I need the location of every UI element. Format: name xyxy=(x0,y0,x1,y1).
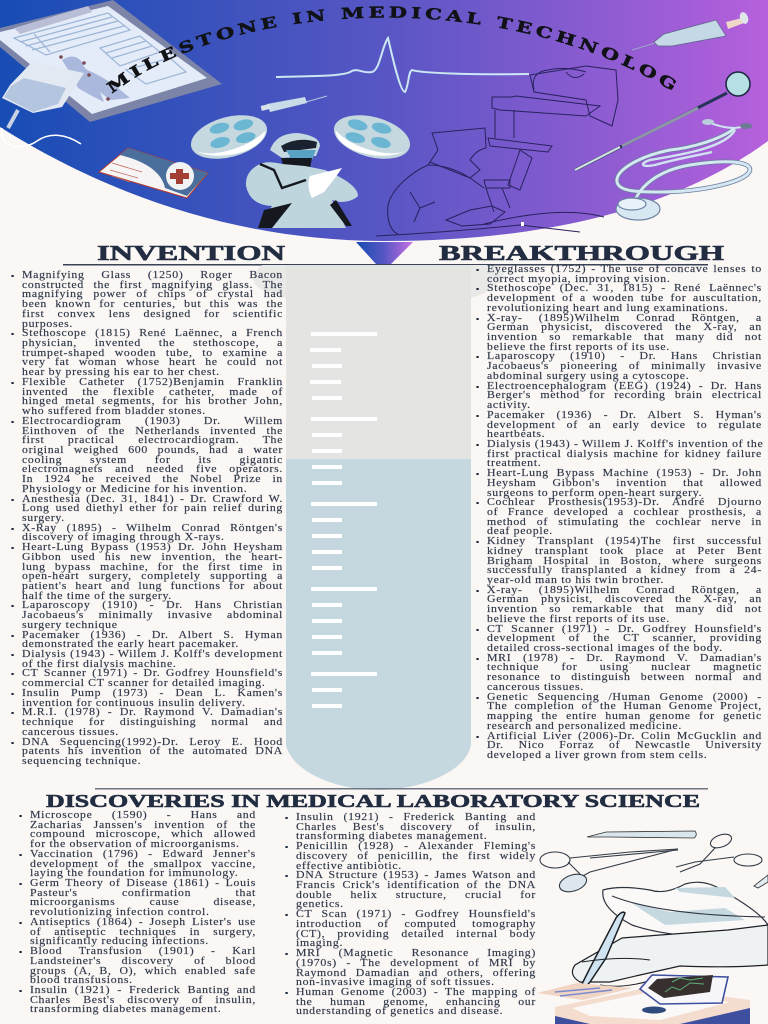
item: microscope: for the observation of microorganisms. xyxy=(30,839,240,850)
item: eeg: Electroencephalogram (EEG) (1924) - Dr. Hans xyxy=(487,381,762,392)
item: human genome: research and personalized medicine. xyxy=(487,721,682,732)
item: mri: resonance to distinguish between normal and xyxy=(487,672,762,683)
panel: discoveries list left xyxy=(19,810,256,1015)
item: insulin xyxy=(296,813,536,842)
item: x-ray repeat xyxy=(487,586,762,625)
item: cochlear prosthesis: method of stimulating the cochlear nerve in xyxy=(487,517,762,528)
hero background xyxy=(0,0,768,241)
item: stethoscope: Stethoscope (1815) René Laënnec, a French xyxy=(22,328,283,339)
item: cochlear prosthesis: Cochlear Prosthesis(1953)-Dr. André Djourno xyxy=(487,497,762,508)
item: stethoscope xyxy=(487,284,762,314)
item: kidney transplant xyxy=(487,537,762,586)
test tube xyxy=(286,265,471,790)
item: germ theory: revolutionizing infection control. xyxy=(30,907,210,918)
item: eeg: Berger's method for recording brain electrical xyxy=(487,390,762,401)
item: insulin pump: invention for continuous insulin delivery. xyxy=(22,698,246,709)
item: pacemaker xyxy=(487,411,762,440)
item: laparoscopy: Jacobaeus's pioneering of minimally invasive xyxy=(487,361,762,372)
item: insulin xyxy=(30,986,256,1015)
item: dialysis xyxy=(22,650,283,669)
item: mri: cancerous tissues. xyxy=(487,682,584,693)
item: germ theory: Germ Theory of Disease (1861) - Louis xyxy=(30,878,256,889)
item: ct scanner: CT Scanner (1971) - Dr. Godfrey Hounsfield's xyxy=(487,624,762,635)
item: x-ray xyxy=(487,314,762,352)
item: kidney transplant: successfully transplanted a kidney from a 24- xyxy=(487,565,762,576)
item: pacemaker: Pacemaker (1936) - Dr. Albert S. Hyman's xyxy=(487,410,762,421)
icon: surgical lamp right xyxy=(329,108,415,166)
item: dna structure: Francis Crick's identification of the DNA xyxy=(296,880,536,891)
item: laparoscopy xyxy=(22,601,283,631)
item: blood transfusion xyxy=(30,947,256,986)
item: anesthesia: Long used diethyl ether for pain relief during xyxy=(22,503,283,514)
item: heart-lung bypass: patient's heart and lung functions for about xyxy=(22,581,283,592)
item: ct scan xyxy=(296,910,536,949)
icon: IV bag xyxy=(2,62,84,147)
item: x-ray: X-ray- (1895)Wilhelm Conrad Röntgen, a xyxy=(487,313,762,324)
tube ticks xyxy=(310,332,377,708)
item: heart-lung bypass xyxy=(22,543,283,601)
item: eeg xyxy=(487,382,762,411)
divider xyxy=(63,264,708,266)
item: stethoscope: development of a wooden tube for auscultation, xyxy=(487,293,762,304)
item: x-ray: German physicist, discovered the X-ray, an xyxy=(487,322,762,333)
item: flexible catheter: Flexible Catheter (1752)Benjamin Franklin xyxy=(22,377,283,388)
item: magnifying glass xyxy=(22,271,283,329)
item: dna structure: DNA Structure (1953) - James Watson and xyxy=(296,870,536,881)
item: stethoscope xyxy=(22,329,283,378)
item: heart-lung machine: surgeons to perform open-heart surgery. xyxy=(487,488,702,499)
heading: discoveries: DISCOVERIES IN MEDICAL LABORATORY SCIENCE xyxy=(46,791,700,811)
item: penicillin: effective antibiotic. xyxy=(296,861,402,872)
item: kidney transplant: kidney transplant took place at Peter Bent xyxy=(487,546,762,557)
item: vaccination: Vaccination (1796) - Edward Jenner's xyxy=(30,849,256,860)
item: microscope xyxy=(30,811,256,850)
item: dna structure: double helix structure, crucial for xyxy=(296,890,536,901)
item: flexible catheter: who suffered from bladder stones. xyxy=(22,406,206,417)
item: heart-lung bypass: Heart-Lung Bypass (1953) Dr. John Heysham xyxy=(22,542,283,553)
item: mri: M.R.I. (1978) - Dr. Raymond V. Damadian's xyxy=(22,707,283,718)
icon: surgical lamp left xyxy=(186,108,272,166)
item: ct scan: introduction of computed tomography xyxy=(296,919,536,930)
item: flexible catheter xyxy=(22,378,283,417)
item: x-ray repeat: X-ray- (1895)Wilhelm Conrad Röntgen, a xyxy=(487,585,762,596)
item: kidney transplant: Kidney Transplant (1954)The first successful xyxy=(487,536,762,547)
icon: scalpel xyxy=(587,831,696,838)
item: magnifying glass: first convex lens designed for scientific xyxy=(22,309,283,320)
icon: clipboard xyxy=(0,0,222,122)
item: mri: technique for using nuclear magnetic xyxy=(487,662,762,673)
item: anesthesia: Anesthesia (Dec. 31, 1841) - Dr. Crawford W. xyxy=(22,494,283,505)
icon: dental mirror xyxy=(575,72,750,170)
item: human genome: Human Genome (2003) - The mapping of xyxy=(296,987,536,998)
item: artificial liver: developed a liver grown from stem cells. xyxy=(487,750,707,761)
item: blood transfusion: blood transfusions. xyxy=(30,975,133,986)
item: stethoscope: Stethoscope (Dec. 31, 1815) - René Laënnec's xyxy=(487,283,762,294)
icon: monitor device xyxy=(537,975,750,1024)
item: electrocardiogram: electromagnets and needed five operators. xyxy=(22,464,283,475)
item: mri: non-invasive imaging of soft tissues. xyxy=(296,977,495,988)
item: blood transfusion: Landsteiner's discovery of blood xyxy=(30,956,256,967)
item: germ theory: Pasteur's confirmation that xyxy=(30,888,256,899)
item: stethoscope: hear by pressing his ear to her chest. xyxy=(22,367,220,378)
item: x-ray xyxy=(22,524,283,543)
item: vaccination: development of the smallpox vaccine, xyxy=(30,859,256,870)
item: magnifying glass: been known for centuries, but this was the xyxy=(22,299,283,310)
item: anesthesia: surgery. xyxy=(22,513,65,524)
icon: hand with pen xyxy=(572,912,768,993)
item: laparoscopy xyxy=(487,352,762,382)
item: artificial liver: Artificial Liver (2006)-Dr. Colin McGucklin and xyxy=(487,730,762,742)
item: insulin pump: Insulin Pump (1973) - Dean L. Kamen's xyxy=(22,688,283,699)
item: insulin: transforming diabetes management. xyxy=(30,1004,221,1015)
item: electrocardiogram: first practical electrocardiogram. The xyxy=(22,435,283,446)
item: heart-lung bypass: half the time of the surgery. xyxy=(22,591,172,602)
item: heart-lung bypass: open-heart surgery, completely supporting a xyxy=(22,571,283,582)
item: stethoscope: revolutionizing heart and lung examinations. xyxy=(487,303,728,314)
item: pacemaker: development of an early device to regulate xyxy=(487,420,762,430)
icon: large syringe xyxy=(632,11,750,50)
item: human genome: Genetic Sequencing /Human Genome (2000) - xyxy=(487,692,762,703)
item: heart-lung bypass: Gibbon used his new invention, the heart- xyxy=(22,552,283,563)
item: electrocardiogram: In 1924 he received the Nobel Prize in xyxy=(22,474,283,485)
item: x-ray repeat: believe the first reports of its use. xyxy=(487,614,670,625)
icon: kidney dish xyxy=(603,882,768,938)
icon: small syringe xyxy=(261,96,327,112)
item: penicillin: Penicillin (1928) - Alexander Fleming's xyxy=(296,841,536,852)
item: pacemaker: heartbeats. xyxy=(487,429,545,440)
item: flexible catheter: invented the flexible catheter, made of xyxy=(22,387,283,398)
item: cochlear prosthesis xyxy=(487,498,762,537)
item: flexible catheter: hinged metal segments, for his brother John, xyxy=(22,396,283,407)
item: mri xyxy=(487,654,762,693)
item: laparoscopy: abdominal surgery using a cytoscope. xyxy=(487,371,689,382)
item: pacemaker: Pacemaker (1936) - Dr. Albert S. Hyman xyxy=(22,630,283,641)
icon: heartbeat line xyxy=(276,38,529,92)
item: mri xyxy=(22,708,283,738)
item: electrocardiogram: Electrocardiogram (1903) Dr. Willem xyxy=(22,416,283,427)
item: blood transfusion: Blood Transfusion (1901) - Karl xyxy=(30,946,256,957)
item: heart-lung machine: Heart-Lung Bypass Machine (1953) - Dr. John xyxy=(487,468,762,479)
item: penicillin xyxy=(296,842,536,871)
small mark xyxy=(521,222,524,226)
item: magnifying glass: Magnifying Glass (1250) Roger Bacon xyxy=(22,270,283,281)
item: eyeglasses xyxy=(487,265,762,284)
item: antiseptics: significantly reducing infections. xyxy=(30,936,209,947)
item: kidney transplant: year-old man to his twin brother. xyxy=(487,575,664,586)
item: human genome xyxy=(296,988,536,1017)
item: dna sequencing: DNA Sequencing(1992)-Dr. Leroy E. Hood xyxy=(22,736,283,748)
item: heart-lung machine: Heysham Gibbon's invention that allowed xyxy=(487,478,762,489)
item: germ theory: microorganisms cause disease, xyxy=(30,897,256,908)
item: electrocardiogram: Physiology or Medicine for his invention. xyxy=(22,484,247,495)
item: laparoscopy: Laparoscopy (1910) - Dr. Hans Christian xyxy=(22,600,283,611)
item: antiseptics xyxy=(30,918,256,947)
item: dialysis: treatment. xyxy=(487,458,541,469)
item: anesthesia xyxy=(22,495,283,524)
item: dna sequencing: sequencing technique. xyxy=(22,756,141,767)
item: ct scanner: development of the CT scanner, providing xyxy=(487,633,762,644)
test tube lip xyxy=(254,265,505,298)
item: microscope: Microscope (1590) - Hans and xyxy=(30,810,256,821)
panel: breakthrough list xyxy=(476,264,763,761)
item: dialysis: Dialysis (1943) - Willem J. Kolff's invention of the xyxy=(487,439,763,450)
item: electrocardiogram: original weighed 600 pounds, had a water xyxy=(22,445,283,456)
item: pacemaker xyxy=(22,631,283,650)
item: heart-lung machine xyxy=(487,469,762,498)
item: laparoscopy: Jacobaeus's minimally invasive abdominal xyxy=(22,610,283,621)
item: pacemaker: demonstrated the early heart pacemaker. xyxy=(22,639,239,650)
item: magnifying glass: magnifying power of chips of crystal had xyxy=(22,289,283,300)
item: laparoscopy: surgery technique xyxy=(22,620,118,631)
item: mri: Raymond Damadian and others, offering xyxy=(296,968,536,978)
item: x-ray: X-Ray (1895) - Wilhelm Conrad Röntgen's xyxy=(22,523,283,534)
item: dialysis: of the first dialysis machine. xyxy=(22,659,177,670)
heading: breakthrough: BREAKTHROUGH xyxy=(439,241,724,265)
item: vaccination xyxy=(30,850,256,879)
item: insulin: Insulin (1921) - Frederick Banting and xyxy=(296,812,536,823)
item: dna sequencing: patents his invention of the automated DNA xyxy=(22,746,283,757)
item: ct scan: imaging. xyxy=(296,938,343,949)
item: x-ray: believe the first reports of its use. xyxy=(487,342,670,353)
item: cochlear prosthesis: deaf people. xyxy=(487,526,553,537)
item: stethoscope: physician, invented the stethoscope, a xyxy=(22,338,283,349)
item: artificial liver: Dr. Nico Forraz of Newcastle University xyxy=(487,740,762,751)
item: ct scanner: detailed cross-sectional images of the body. xyxy=(487,643,723,654)
item: dna structure: genetics. xyxy=(296,899,344,910)
item: mri xyxy=(296,949,536,988)
item: x-ray: discovery of imaging through X-rays. xyxy=(22,532,225,543)
item: cochlear prosthesis: of France developed a cochlear prosthesis, a xyxy=(487,507,762,518)
heading: invention: INVENTION xyxy=(97,241,285,265)
panel: invention list xyxy=(11,270,283,767)
item: ct scanner xyxy=(487,625,762,654)
item: x-ray repeat: German physicist, discovered the X-ray, an xyxy=(487,594,762,605)
item: insulin: Insulin (1921) - Frederick Banting and xyxy=(30,985,256,996)
item: x-ray repeat: invention so remarkable that many did not xyxy=(487,604,762,615)
item: human genome: mapping the entire human genome for genetic xyxy=(487,711,762,722)
item: germ theory xyxy=(30,879,256,918)
item: human genome: understanding of genetics and disease. xyxy=(296,1006,503,1017)
item: stethoscope: very fat woman whose heart he could not xyxy=(22,357,283,368)
item: heart-lung bypass: lung bypass machine, for the first time in xyxy=(22,562,283,573)
item: human genome: The completion of the Human Genome Project, xyxy=(487,701,762,712)
item: eyeglasses: correct myopia, improving vision. xyxy=(487,274,671,285)
icon: scissors xyxy=(676,832,762,872)
item: artificial liver xyxy=(487,732,762,761)
item: ct scan: (CT), providing detailed internal body xyxy=(296,929,536,940)
item: insulin: Charles Best's discovery of insulin, xyxy=(30,995,256,1006)
item: mri: cancerous tissues. xyxy=(22,727,119,738)
item: antiseptics: Antiseptics (1864) - Joseph Lister's use xyxy=(30,917,256,928)
item: dialysis xyxy=(487,440,762,469)
item: mri: (1970s) - The development of MRI by xyxy=(296,958,536,969)
item: electrocardiogram: cooling system for its gigantic xyxy=(22,455,283,466)
item: ct scanner: commercial CT scanner for detailed imaging. xyxy=(22,678,266,689)
funnel tip xyxy=(356,242,413,264)
icon: medical card xyxy=(99,148,208,198)
item: insulin: Charles Best's discovery of insulin, xyxy=(296,822,536,833)
item: ct scan: CT Scan (1971) - Godfrey Hounsfield's xyxy=(296,909,536,920)
item: x-ray: invention so remarkable that many did not xyxy=(487,332,762,343)
panel: discoveries list right xyxy=(285,812,536,1017)
item: ct scanner: CT Scanner (1971) - Dr. Godfrey Hounsfield's xyxy=(22,668,283,679)
item: mri: technique for distinguishing normal and xyxy=(22,717,283,728)
item: vaccination: laying the foundation for immunology. xyxy=(30,868,238,879)
item: stethoscope: trumpet-shaped wooden tube, to examine a xyxy=(22,348,283,359)
item: magnifying glass: constructed the first magnifying glass. The xyxy=(22,280,283,291)
item: eeg: activity. xyxy=(487,400,531,411)
item: insulin: transforming diabetes management. xyxy=(296,831,487,842)
item: microscope: Zacharias Janssen's invention of the xyxy=(30,820,256,831)
icon: surgeon xyxy=(246,133,358,228)
item: dna structure xyxy=(296,871,536,910)
item: microscope: compound microscope, which allowed xyxy=(30,829,256,840)
item: laparoscopy: Laparoscopy (1910) - Dr. Hans Christian xyxy=(487,351,762,362)
item: penicillin: discovery of penicillin, the first widely xyxy=(296,851,536,862)
item: kidney transplant: Brigham Hospital in Boston, where surgeons xyxy=(487,556,762,567)
item: dna sequencing xyxy=(22,738,283,767)
item: insulin pump xyxy=(22,689,283,708)
item: antiseptics: of antiseptic techniques in surgery, xyxy=(30,927,256,938)
divider xyxy=(95,788,708,790)
item: electrocardiogram: Einthoven of the Netherlands invented the xyxy=(22,426,283,436)
item: ct scanner xyxy=(22,669,283,689)
icon: forceps xyxy=(540,849,678,895)
icon: microscope operator line drawing xyxy=(376,66,618,236)
item: magnifying glass: purposes. xyxy=(22,319,73,330)
item: dialysis: first practical dialysis machine for kidney failure xyxy=(487,449,762,460)
item: blood transfusion: groups (A, B, O), which enabled safe xyxy=(30,966,256,976)
item: human genome xyxy=(487,693,762,732)
item: mri: MRI (Magnetic Resonance Imaging) xyxy=(296,948,536,959)
item: electrocardiogram xyxy=(22,417,283,495)
icon: stethoscope xyxy=(616,119,752,220)
item: human genome: the human genome, enhancing our xyxy=(296,997,536,1008)
item: eyeglasses: Eyeglasses (1752) - The use of concave lenses to xyxy=(487,264,762,275)
item: mri: MRI (1978) - Dr. Raymond V. Damadian's xyxy=(487,653,762,664)
item: dialysis: Dialysis (1943) - Willem J. Kolff's development xyxy=(22,649,283,660)
icon: small instrument xyxy=(754,875,768,888)
